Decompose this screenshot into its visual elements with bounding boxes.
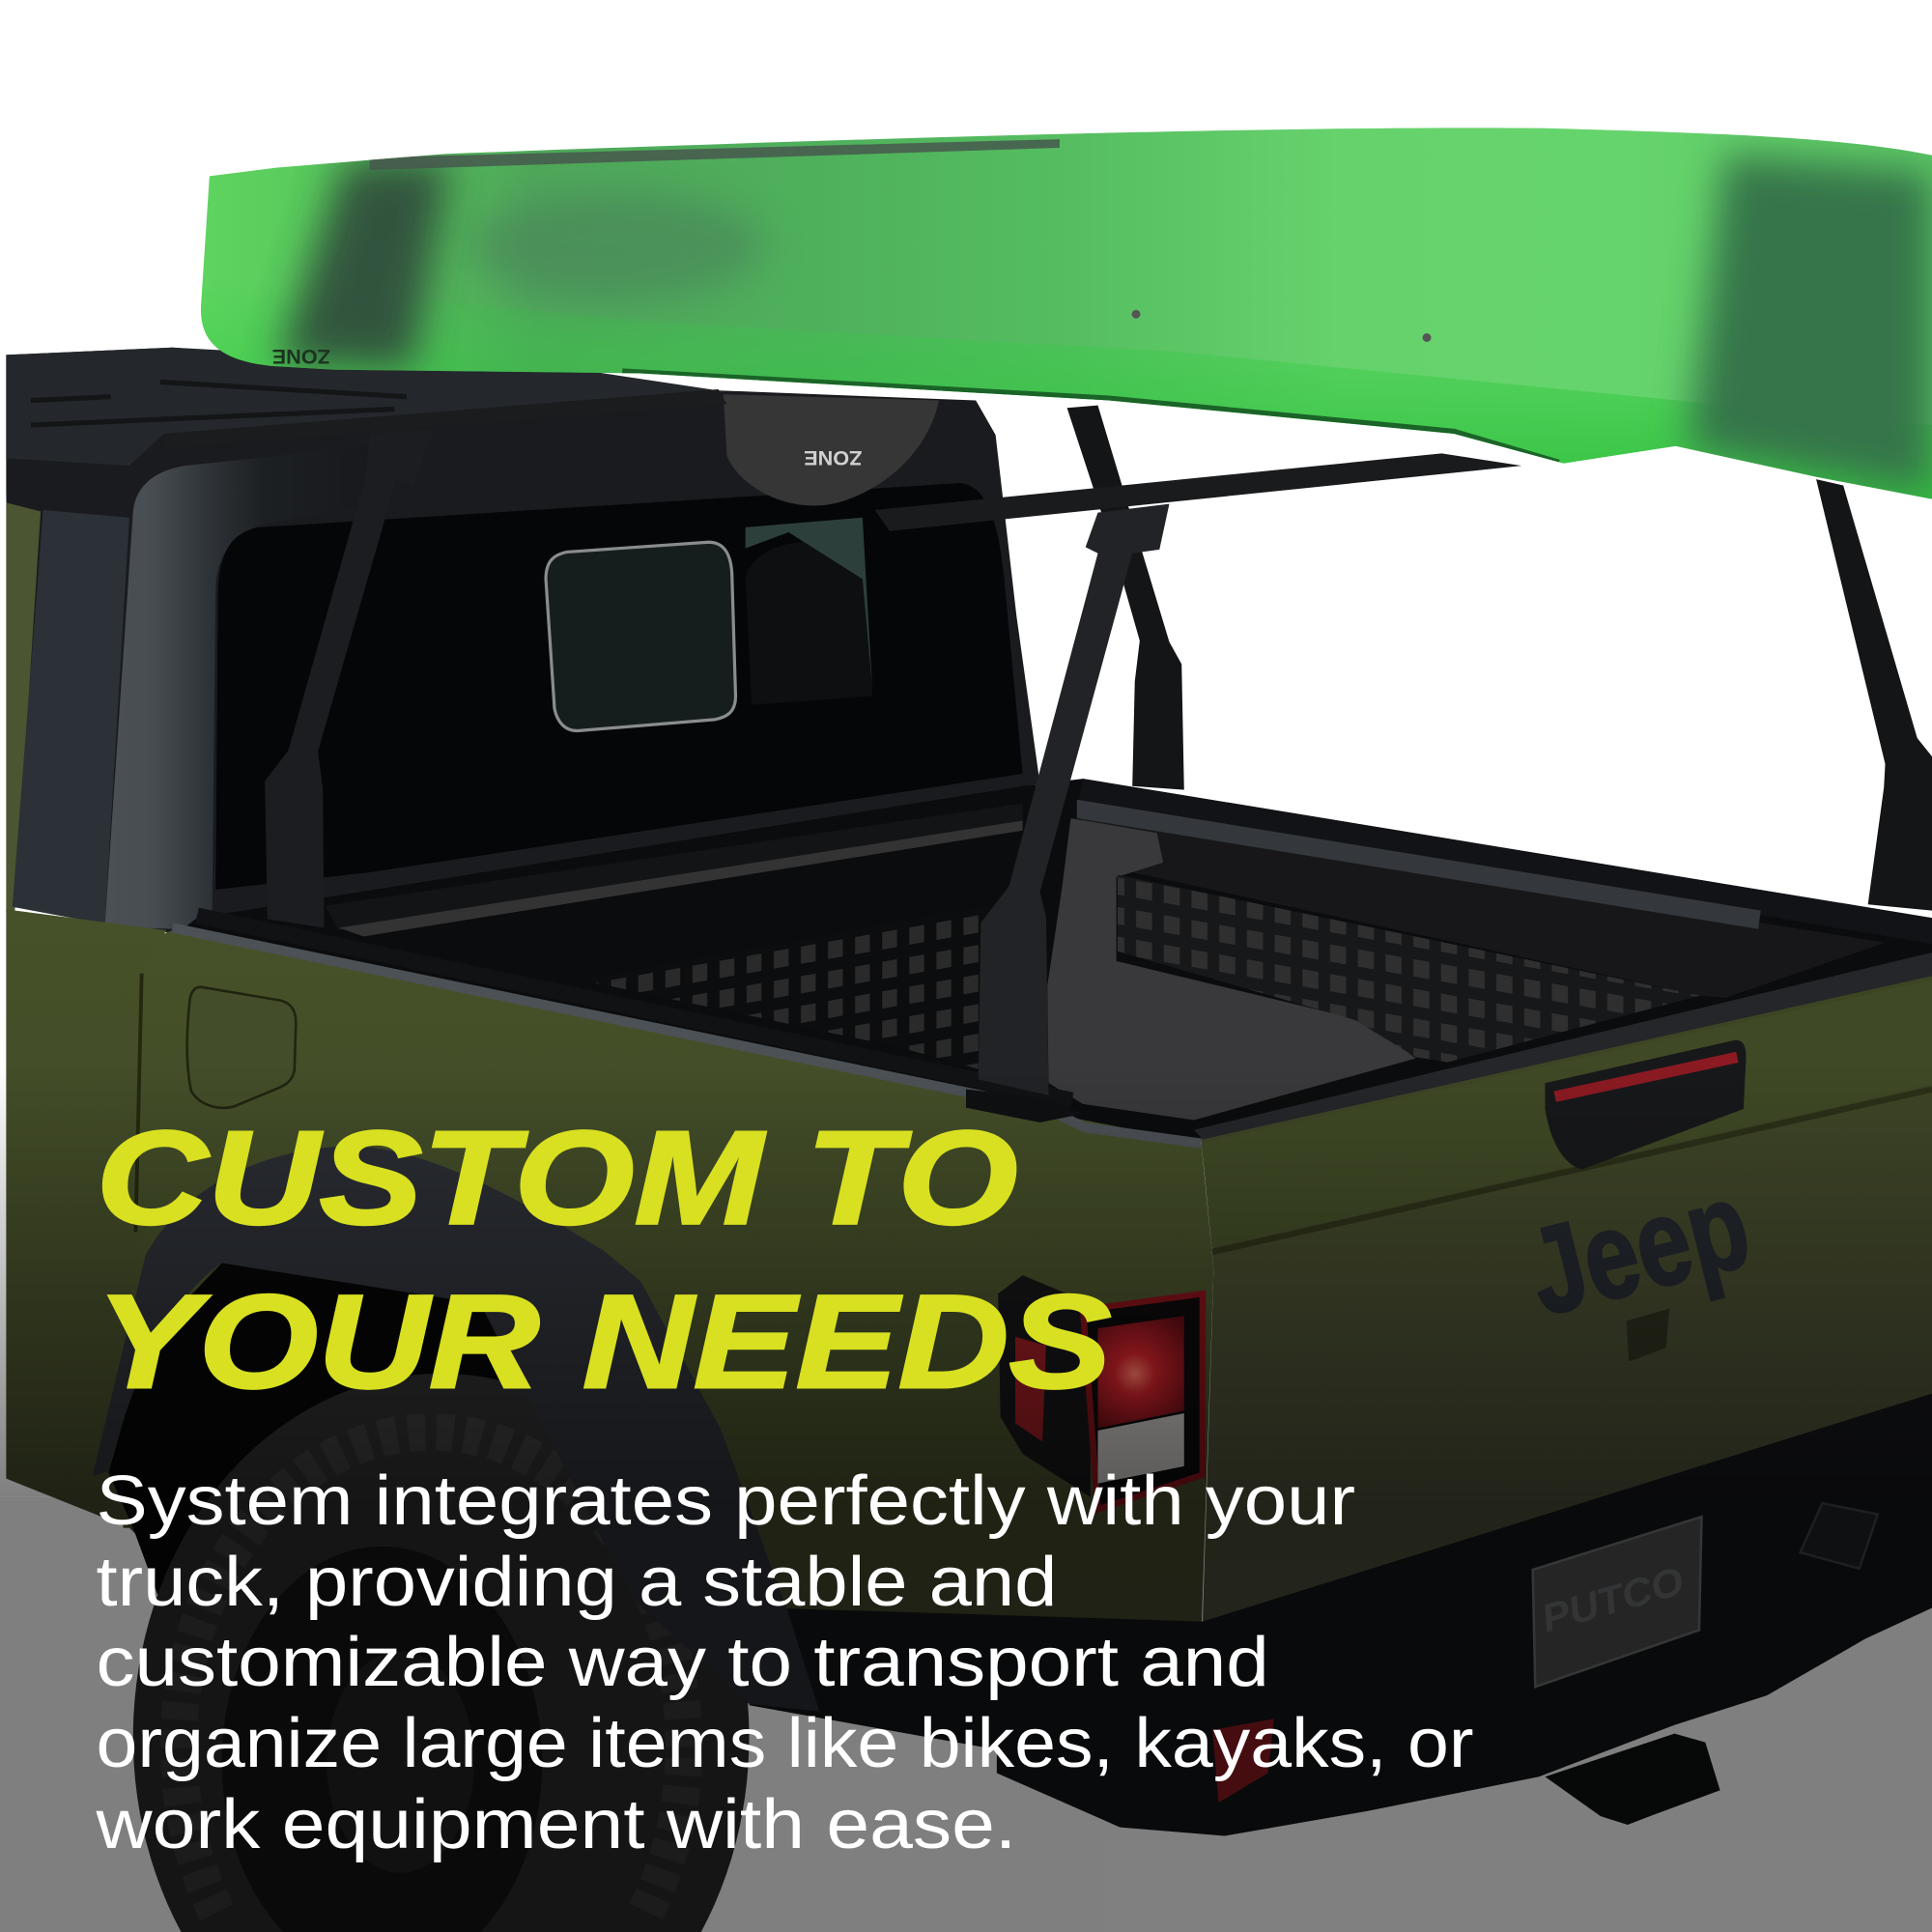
body line 3: customizable way to transport and [96, 1623, 1269, 1701]
tailgate upper highlight [1202, 980, 1932, 1247]
jeep badge: Jeep [1516, 1156, 1762, 1342]
body line 5: work equipment with ease. [95, 1785, 1016, 1863]
rack foot [966, 1090, 1083, 1122]
carpet strip [339, 820, 1023, 936]
truck cab [6, 348, 1040, 936]
dark patch lower mid-left [469, 191, 764, 301]
plate text: PUTCO [1537, 1558, 1689, 1641]
tire tread [179, 1432, 684, 1913]
title line 1: CUSTOM TO [96, 1104, 1018, 1253]
title [96, 1104, 1112, 1416]
truck body [6, 909, 1932, 1633]
rear window [215, 483, 1023, 890]
left molle panel [579, 906, 985, 1069]
rim centre [327, 1651, 474, 1873]
seat logo: ZONE [804, 446, 862, 470]
front cab body panel [6, 909, 166, 1540]
tailgate panel [1202, 976, 1932, 1624]
lower hull highlight [201, 313, 1932, 498]
door seam [135, 974, 142, 1233]
bed carpet floor [1047, 818, 1416, 1120]
rear upright back [1067, 406, 1184, 790]
bumper body [750, 1394, 1932, 1836]
title line 2: YOUR NEEDS [96, 1267, 1112, 1416]
kayak seat [724, 394, 939, 505]
tail light [998, 1275, 1203, 1509]
hull rivets [1132, 310, 1432, 342]
olive cab strip [6, 502, 41, 912]
trailer hitch [1545, 1734, 1720, 1825]
upper bed rail [1078, 779, 1932, 944]
fade band [0, 1062, 1932, 1497]
cab side panel [13, 510, 129, 924]
front crossbar [164, 389, 727, 448]
rear corner pillar [104, 446, 370, 930]
tailgate crease [1212, 1090, 1932, 1252]
main red lens [1097, 1316, 1184, 1428]
right molle panel [1118, 875, 1700, 1062]
red lens frame [1083, 1293, 1203, 1509]
tailgate top lip [1194, 952, 1932, 1144]
kayak [185, 117, 1932, 511]
third brake light [1555, 1057, 1737, 1096]
kayak brand mark: ZONE [272, 345, 330, 369]
wheel well shadow [108, 1263, 635, 1602]
body text [95, 1462, 1474, 1863]
black side rail [197, 916, 1072, 1100]
light housing [998, 1275, 1091, 1497]
tailgate handle [1545, 1040, 1746, 1169]
dark top strip [370, 139, 1060, 170]
body line 2: truck, providing a stable and [96, 1543, 1057, 1621]
rear wheel [108, 1263, 750, 1932]
side bed rail trim [173, 927, 1202, 1144]
seat pad [724, 394, 939, 505]
interior seat headrest [746, 542, 872, 705]
roof rack [164, 389, 1932, 1122]
rim [222, 1547, 542, 1932]
cab side bed rail [326, 804, 1023, 930]
dark hull smudge left [277, 160, 450, 370]
bumper sensor [1801, 1503, 1878, 1569]
bed side wall [1077, 813, 1886, 998]
roof ridge lines [31, 382, 407, 425]
far right upright [1816, 479, 1932, 911]
bright reflection through cab [746, 518, 872, 690]
hardtop roof [6, 348, 1040, 936]
body line 1: System integrates perfectly with your [96, 1462, 1355, 1540]
license plate frame [1533, 1517, 1701, 1687]
fuel door [187, 987, 296, 1108]
clear reverse lens [1097, 1413, 1184, 1484]
small tailgate emblem [1627, 1309, 1669, 1361]
roof top surface [6, 348, 727, 466]
bed interior [173, 779, 1932, 1140]
kayak hull [185, 117, 1932, 511]
body line 4: organize large items like bikes, kayaks, or [96, 1704, 1474, 1782]
sliding window [546, 542, 735, 730]
truck bed [173, 779, 1932, 1144]
bumper red reflector [1212, 1719, 1274, 1803]
tire [133, 1374, 750, 1932]
rear bumper [750, 1394, 1932, 1836]
bed side panel [124, 930, 1213, 1633]
near crossbar [875, 453, 1521, 531]
left upright [265, 429, 434, 927]
solid gray band [0, 1497, 1932, 1932]
dark hull smudge right [1688, 154, 1932, 493]
fender flare [93, 1146, 819, 1712]
bottom fade overlay [0, 1062, 1932, 1932]
black lens backing [1083, 1293, 1203, 1509]
near upright [979, 504, 1169, 1095]
hull seam [622, 372, 1559, 464]
outer red lens [1015, 1337, 1046, 1441]
